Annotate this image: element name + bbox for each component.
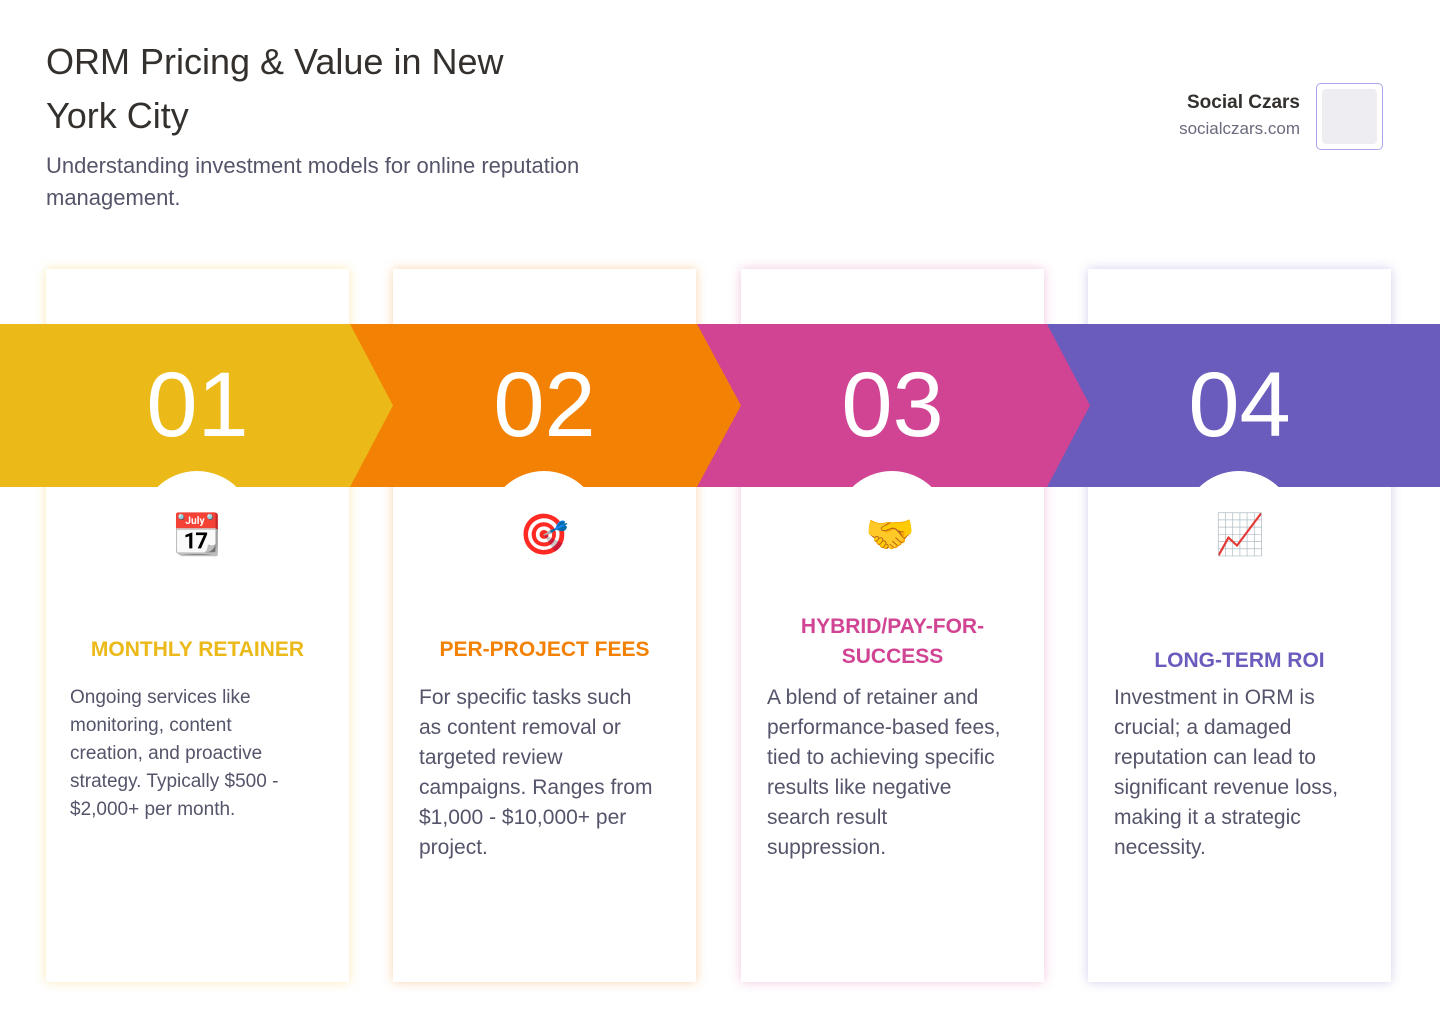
brand [1179, 92, 1300, 138]
numbers: 03 [841, 354, 944, 456]
panel 1 text: Ongoing services like monitoring, content creation, and proactive strategy. Typically $500 - $2,000+ per month. [70, 687, 278, 820]
panel 2 text: For specific tasks such as content removal or targeted review campaigns. Ranges from $1,000 - $10,000+ per project. [419, 686, 652, 859]
numbers: 01 [146, 354, 249, 456]
card 4 [1088, 269, 1391, 982]
card 2 [393, 269, 696, 982]
numbers [146, 354, 1291, 456]
card 3 [741, 269, 1044, 982]
title: ORM Pricing & Value in New York City [46, 41, 504, 136]
icon: handshake: 🤝 [865, 512, 915, 558]
subtitle: Understanding investment models for online reputation management. [46, 153, 579, 210]
arrow band [0, 324, 1440, 487]
panel 2 text: PER-PROJECT FEES [439, 638, 650, 661]
card 1 [46, 269, 349, 982]
panel 1 text: MONTHLY RETAINER [91, 638, 304, 661]
panel 4 text: LONG-TERM ROI [1154, 649, 1325, 672]
panel 4 text: Investment in ORM is crucial; a damaged reputation can lead to significant revenue loss, making it a strategic necessity. [1114, 686, 1338, 859]
logo [1316, 83, 1383, 150]
numbers: 02 [493, 354, 596, 456]
icon: calendar: 📆 [172, 512, 222, 558]
panel 3 text: A blend of retainer and performance-based fees, tied to achieving specific results like negative search result suppression. [767, 686, 1000, 859]
numbers: 04 [1188, 354, 1291, 456]
circle tabs [158, 471, 1278, 487]
brand: Social Czars [1187, 92, 1300, 113]
panel 1 text [70, 638, 304, 820]
panel 3 text: HYBRID/PAY-FOR-SUCCESS [801, 615, 984, 668]
icon: chart: 📈 [1215, 512, 1265, 558]
icon: target: 🎯 [519, 512, 569, 558]
brand: socialczars.com [1179, 119, 1300, 138]
